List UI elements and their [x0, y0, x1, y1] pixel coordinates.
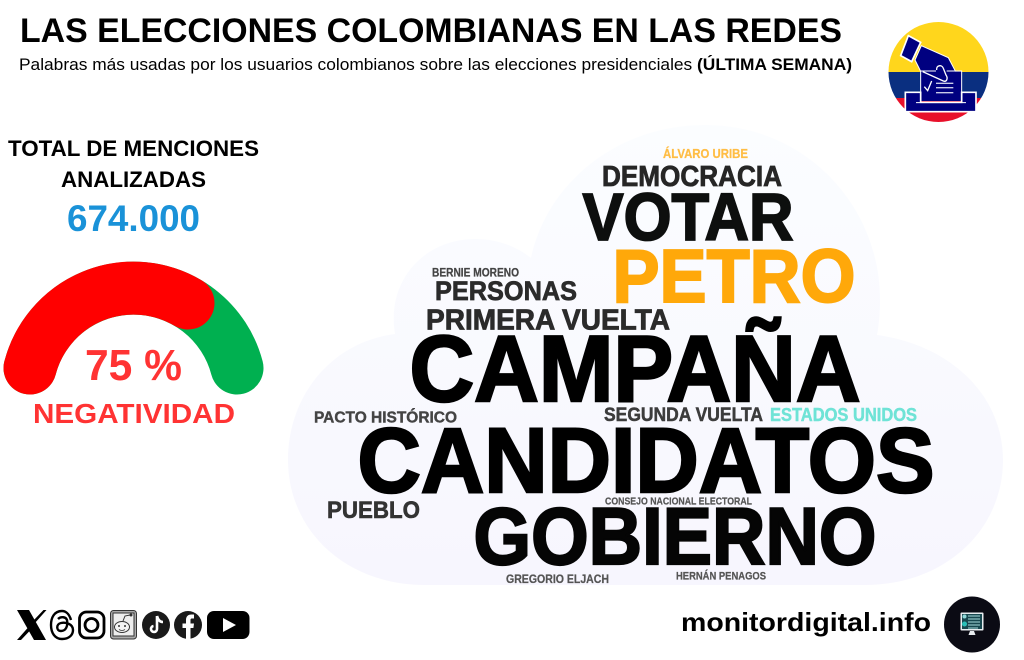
icon: ballot box on Colombian flag circle	[888, 21, 989, 123]
words: SEGUNDA VUELTA	[604, 404, 763, 426]
icon: Threads	[51, 611, 73, 639]
words: BERNIE MORENO	[432, 266, 519, 280]
icon: Reddit	[110, 610, 136, 639]
words: PERSONAS	[435, 276, 577, 306]
words: PETRO	[612, 235, 856, 319]
words: CAMPAÑA	[410, 316, 860, 421]
social media icons	[17, 610, 250, 640]
icon: YouTube	[207, 611, 250, 639]
words: DEMOCRACIA	[602, 161, 782, 193]
total mentions heading	[8, 136, 259, 192]
title: LAS ELECCIONES COLOMBIANAS EN LAS REDES	[20, 12, 842, 50]
words: PACTO HISTÓRICO	[314, 407, 457, 426]
words: HERNÁN PENAGOS	[676, 570, 766, 582]
words: ÁLVARO URIBE	[663, 146, 748, 161]
words: PUEBLO	[327, 497, 420, 524]
total mentions heading: TOTAL DE MENCIONES	[8, 136, 259, 161]
gauge label: NEGATIVIDAD	[33, 398, 235, 429]
words: ESTADOS UNIDOS	[770, 404, 917, 425]
gauge value: 75 %	[85, 341, 182, 390]
total mentions heading: ANALIZADAS	[61, 167, 206, 192]
words: GREGORIO ELJACH	[506, 572, 609, 586]
icon: Instagram	[80, 612, 104, 638]
icon: X	[17, 610, 46, 640]
word cloud	[288, 125, 1003, 586]
words: GOBIERNO	[474, 492, 876, 582]
words: CONSEJO NACIONAL ELECTORAL	[605, 496, 752, 508]
gauge chart	[30, 288, 237, 368]
words: VOTAR	[582, 180, 794, 255]
icon: TikTok	[142, 611, 170, 639]
words: PRIMERA VUELTA	[426, 305, 670, 337]
subtitle: Palabras más usadas por los usuarios colombianos sobre las elecciones presidenciales (ÚLTIMA SEMANA)	[19, 55, 852, 74]
cloud background	[288, 125, 1003, 585]
words	[314, 146, 934, 586]
icon: Facebook	[174, 611, 202, 639]
website address: monitordigital.info	[681, 607, 931, 637]
icon: monitor badge	[944, 596, 1000, 652]
total mentions number: 674.000	[67, 198, 200, 239]
words: CANDIDATOS	[358, 408, 934, 512]
